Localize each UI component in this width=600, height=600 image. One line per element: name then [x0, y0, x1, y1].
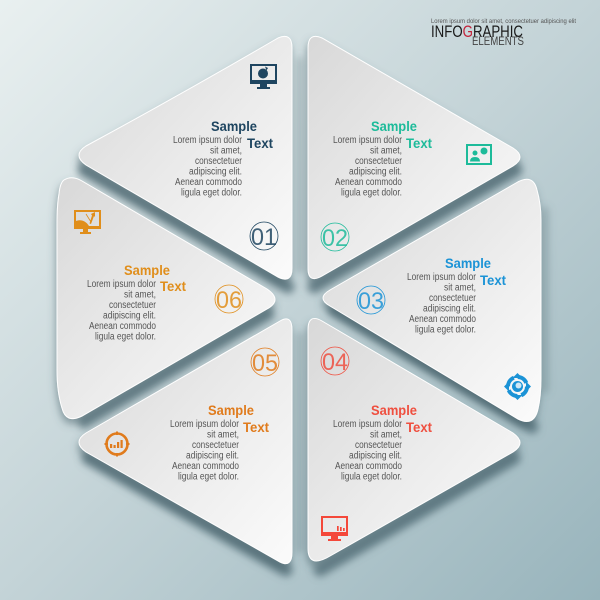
header: infographic elements [431, 18, 576, 48]
heading 03 [445, 255, 506, 288]
number 06: 06 [216, 287, 242, 314]
heading 03: Text [480, 272, 506, 288]
heading 04: Sample [371, 402, 417, 418]
heading 03: Sample [445, 255, 491, 271]
body 05: Aenean commodo [172, 461, 239, 472]
body 01 [173, 135, 243, 198]
number 04: 04 [322, 349, 348, 376]
body 01: adipiscing elit. [189, 166, 242, 178]
body 03: consectetuer [429, 293, 477, 304]
body 02: ligula eget dolor. [341, 188, 402, 198]
body 01: ligula eget dolor. [181, 188, 242, 198]
body 04: ligula eget dolor. [341, 472, 402, 482]
body 03: Lorem ipsum dolor [407, 272, 477, 283]
heading 06: Text [160, 278, 186, 294]
panel 03 [323, 179, 541, 421]
heading 04: Text [406, 419, 432, 435]
body 03: ligula eget dolor. [415, 324, 476, 336]
heading 06 [124, 262, 186, 294]
icon: presentation frame with person and pie [466, 144, 492, 165]
body 01: Aenean commodo [175, 177, 242, 188]
icon: target chart [104, 432, 130, 456]
body 05 [170, 419, 240, 482]
body 05: ligula eget dolor. [178, 472, 239, 482]
heading 02: Sample [371, 118, 417, 134]
heading 01: Text [247, 135, 273, 151]
header: infographic elements: INFOGRAPHIC [431, 22, 523, 41]
body 06: sit amet, [124, 290, 156, 300]
body 06: adipiscing elit. [103, 310, 156, 322]
icon: monitor with bars [321, 516, 348, 541]
body 04: consectetuer [355, 440, 403, 451]
body 01: consectetuer [195, 156, 243, 167]
panel 06 [57, 178, 275, 419]
number 02: 02 [322, 225, 348, 252]
body 06: consectetuer [109, 300, 157, 311]
body 02: Lorem ipsum dolor [333, 135, 403, 146]
body 02: Aenean commodo [335, 177, 402, 188]
body 02 [333, 135, 403, 198]
body 03: sit amet, [444, 282, 476, 294]
body 05: sit amet, [207, 430, 239, 440]
panel cast shadows [84, 60, 545, 570]
body 06: Lorem ipsum dolor [87, 279, 157, 290]
body 06 [87, 279, 157, 342]
panel 01 [79, 36, 292, 279]
panel 02 [308, 36, 520, 279]
body 02: consectetuer [355, 156, 403, 167]
heading 02: Text [406, 135, 432, 151]
heading 06: Sample [124, 262, 170, 278]
header: infographic elements: ELEMENTS [472, 34, 524, 48]
body 06: ligula eget dolor. [95, 332, 156, 342]
body 04: adipiscing elit. [349, 450, 402, 462]
body 04: sit amet, [370, 430, 402, 440]
panel 05 [79, 319, 292, 564]
body 02: sit amet, [370, 146, 402, 156]
body 01: Lorem ipsum dolor [173, 135, 243, 146]
number 05: 05 [252, 350, 278, 377]
heading 02 [371, 118, 432, 151]
heading 01: Sample [211, 118, 257, 134]
heading 05: Text [243, 419, 269, 435]
number 01: 01 [251, 224, 277, 251]
body 01: sit amet, [210, 146, 242, 156]
heading 04 [371, 402, 432, 435]
body 04 [333, 419, 403, 482]
heading 05: Sample [208, 402, 254, 418]
header: infographic elements: Lorem ipsum dolor sit amet, consectetuer adipiscing elit [431, 18, 576, 25]
body 05: Lorem ipsum dolor [170, 419, 240, 430]
icon: monitor with pie chart [250, 64, 277, 89]
body 02: adipiscing elit. [349, 166, 402, 178]
body 05: adipiscing elit. [186, 450, 239, 462]
heading 01 [211, 118, 273, 151]
body 03: Aenean commodo [409, 314, 476, 325]
number 03: 03 [358, 288, 384, 315]
icon: monitor with arrow [74, 210, 101, 234]
body 06: Aenean commodo [89, 321, 156, 332]
body 05: consectetuer [192, 440, 240, 451]
body 03 [407, 272, 477, 336]
panel 04 [308, 318, 520, 561]
icon: cycle arrows with eye [504, 373, 531, 400]
body 04: Aenean commodo [335, 461, 402, 472]
heading 05 [208, 402, 269, 435]
body 03: adipiscing elit. [423, 304, 476, 314]
body 04: Lorem ipsum dolor [333, 419, 403, 430]
